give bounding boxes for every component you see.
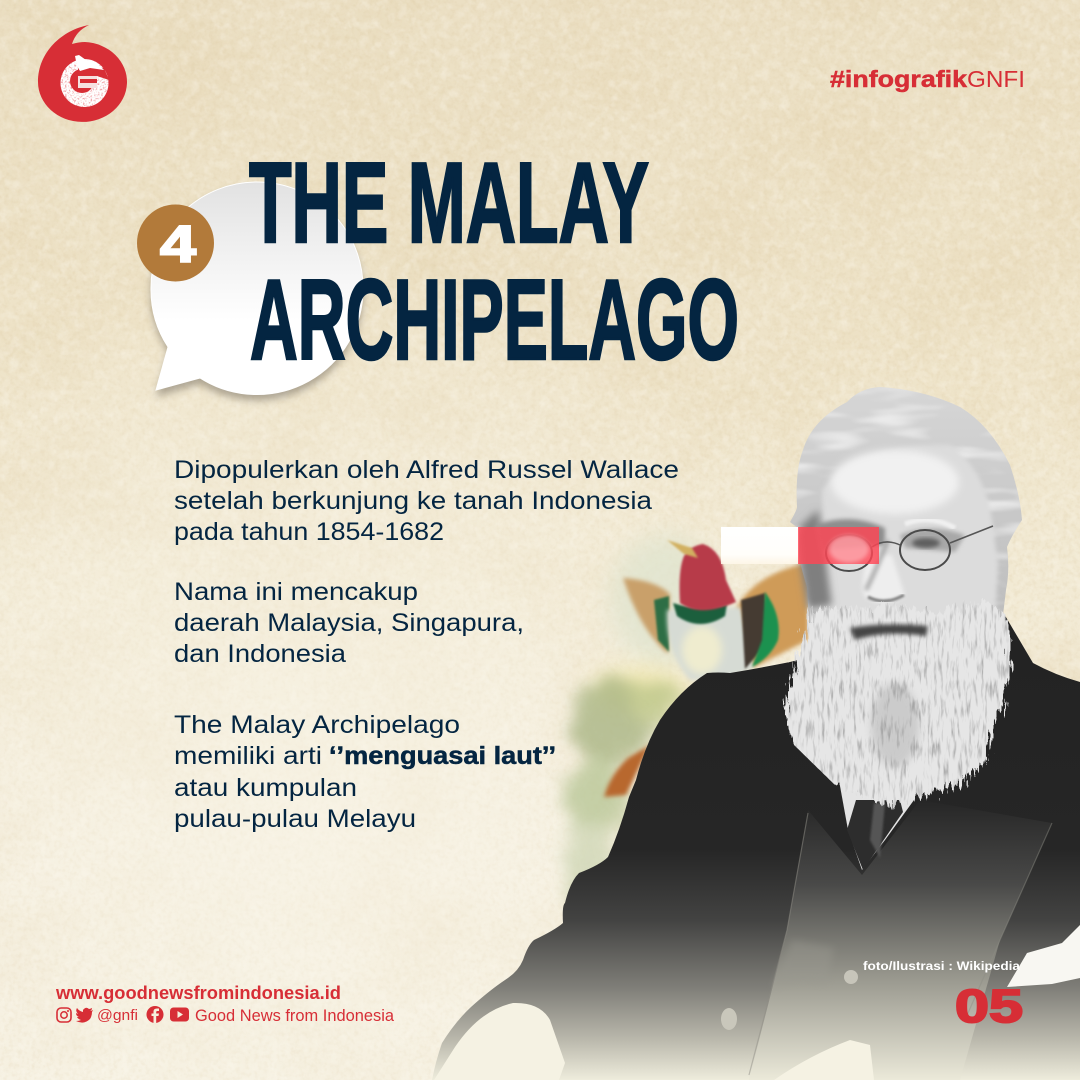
mouth (850, 624, 928, 640)
text block: meaning: atau kumpulan (174, 774, 357, 802)
text block: coverage: daerah Malaysia, Singapura, (174, 609, 524, 637)
text block: intro: pada tahun 1854-1682 (174, 518, 444, 546)
eye shadows and nose (815, 519, 885, 550)
text block: coverage: dan Indonesia (174, 640, 346, 668)
highlight bar: white and red (721, 527, 879, 564)
text block: intro (174, 456, 679, 546)
logo: GNFI (38, 25, 127, 122)
photo credit: foto/Ilustrasi : Wikipedia (863, 959, 1020, 973)
icon: youtube (170, 1008, 189, 1022)
title: ARCHIPELAGO (250, 257, 739, 384)
text block: meaning: pulau-pulau Melayu (174, 805, 416, 833)
cuff and hand (434, 1003, 565, 1080)
text block: coverage (174, 578, 524, 668)
text block: coverage: Nama ini mencakup (174, 578, 418, 606)
illustration: bird of paradise and foliage (566, 535, 808, 918)
handle: @gnfi (97, 1007, 138, 1024)
shirt collar (838, 775, 916, 870)
website url: www.goodnewsfromindonesia.id (55, 983, 341, 1003)
page number: 05 (955, 980, 1023, 1032)
text block: meaning: memiliki arti (174, 742, 322, 770)
title (249, 140, 739, 384)
portrait: Alfred Russel Wallace (432, 387, 1080, 1080)
coat (432, 607, 1080, 1080)
social row (57, 1006, 395, 1025)
pocket handkerchief (1007, 925, 1080, 987)
head silhouette (790, 387, 1022, 700)
text block: meaning: The Malay Archipelago (174, 711, 460, 739)
icon: instagram (57, 1008, 71, 1022)
icon: facebook (146, 1006, 164, 1023)
speech bubble (151, 182, 363, 400)
text block: intro: setelah berkunjung ke tanah Indonesia (174, 487, 652, 515)
text block: meaning (174, 711, 556, 833)
hashtag label: GNFI (967, 66, 1025, 92)
buttons (844, 970, 858, 984)
icon: twitter (76, 1008, 93, 1023)
title: THE MALAY (249, 140, 649, 267)
glasses (826, 535, 872, 571)
waistcoat (749, 800, 1052, 1080)
tie (847, 800, 903, 870)
face (818, 445, 998, 660)
hashtag label (830, 66, 1025, 92)
hashtag label: #infografik (830, 66, 967, 92)
number badge (137, 204, 214, 282)
number badge: 4 (160, 216, 196, 274)
temple shading (798, 510, 832, 610)
waistcoat pocket (772, 940, 834, 988)
beard (784, 600, 1012, 805)
text block: meaning: ‘’menguasai laut’’ (329, 742, 556, 770)
text block: intro: Dipopulerkan oleh Alfred Russel Wallace (174, 456, 679, 484)
second hand (774, 1040, 874, 1080)
page name: Good News from Indonesia (195, 1006, 395, 1025)
